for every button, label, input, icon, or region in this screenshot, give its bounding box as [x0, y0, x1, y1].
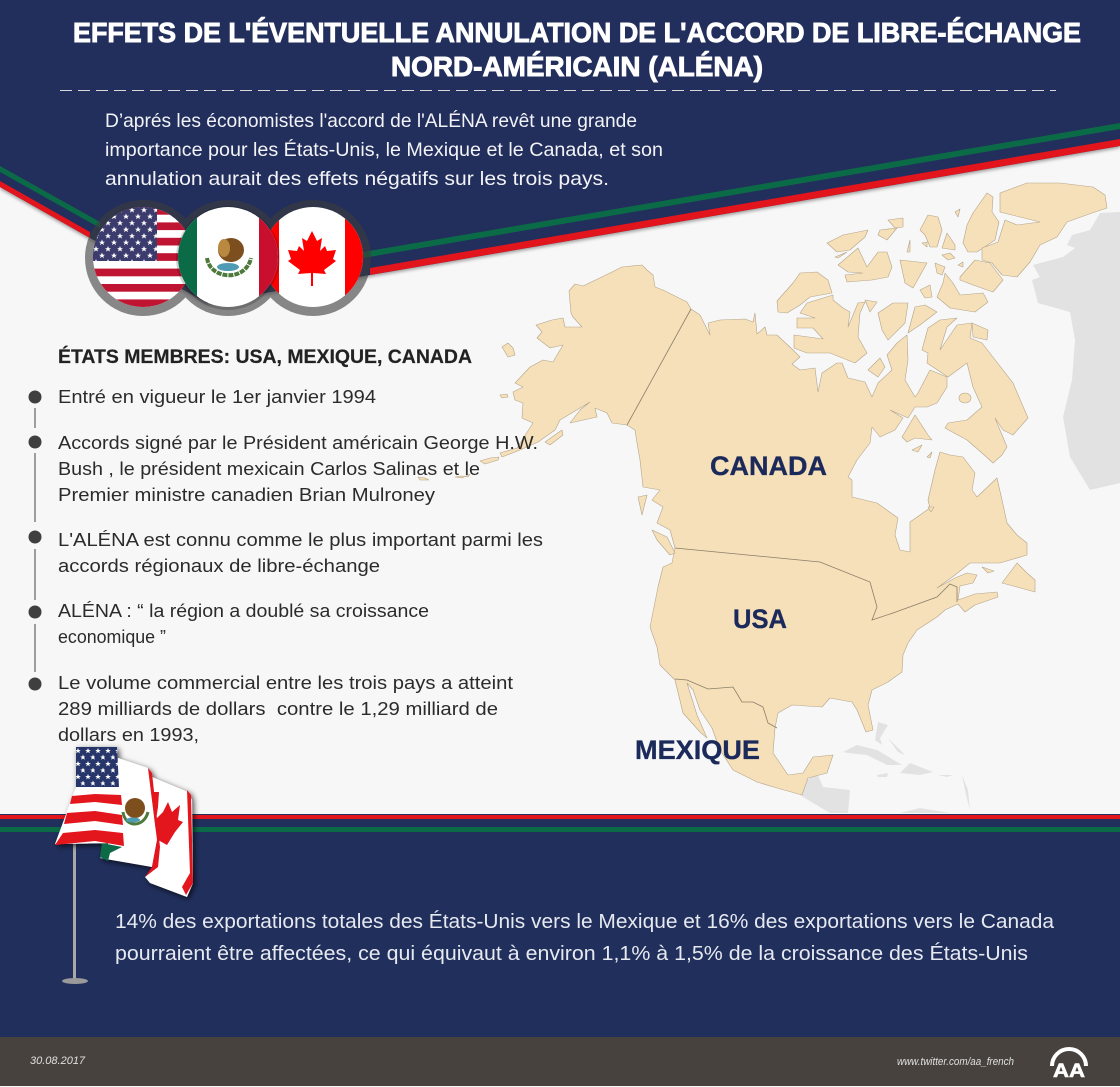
- intro text: D’aprés les économistes l'accord de l'ALÉNA revêt une grande: [105, 109, 637, 132]
- flag rings: [85, 200, 371, 316]
- icon: Mexico flag: [176, 206, 280, 310]
- list text: accords régionaux de libre-échange: [58, 556, 380, 576]
- intro text: annulation aurait des effets négatifs sur les trois pays.: [105, 168, 609, 190]
- list text: 289 milliards de dollars contre le 1,29 milliard de: [58, 699, 498, 719]
- stripes: right: [363, 123, 1120, 275]
- footer bar: [0, 1037, 1120, 1086]
- title: [73, 17, 1081, 82]
- list text: Accords signé par le Président américain George H.W.: [58, 433, 538, 453]
- map: North America: [418, 183, 1120, 813]
- footer url: www.twitter.com/aa_french: [897, 1056, 1014, 1068]
- map label: Canada: CANADA: [710, 451, 827, 481]
- Canada part: [145, 777, 193, 897]
- title: NORD-AMÉRICAIN (ALÉNA): [391, 51, 763, 82]
- map label: USA: USA: [733, 604, 787, 634]
- list text: [58, 387, 543, 745]
- icon: flag pole: [62, 843, 88, 984]
- panel: top navy band: [0, 0, 1120, 303]
- intro text: importance pour les États-Unis, le Mexique et le Canada, et son: [105, 138, 663, 161]
- list text: Bush , le président mexicain Carlos Salinas et le: [58, 459, 480, 479]
- list text: Le volume commercial entre les trois pays a atteint: [58, 673, 513, 693]
- bottom text: 14% des exportations totales des États-Unis vers le Mexique et 16% des exportations vers le Canada: [115, 910, 1055, 933]
- Mexico part: [100, 758, 160, 877]
- date: 30.08.2017: [30, 1055, 86, 1067]
- intro text: [105, 109, 663, 190]
- map: borders: [627, 309, 957, 728]
- map: mainland: [500, 265, 1027, 795]
- icon: USA flag: [93, 207, 193, 307]
- bottom text: [115, 910, 1055, 965]
- list text: dollars en 1993,: [58, 725, 199, 745]
- timeline bullets: [28, 390, 42, 690]
- map: caribbean and central america: [800, 722, 970, 813]
- list text: ALÉNA : “ la région a doublé sa croissance: [58, 601, 429, 621]
- flags: USA, Mexico, Canada: [85, 200, 371, 316]
- stripes: left: [0, 166, 100, 238]
- heading: member states: ÉTATS MEMBRES: USA, MEXIQUE, CANADA: [58, 346, 472, 368]
- list text: Entré en vigueur le 1er janvier 1994: [58, 387, 376, 407]
- list text: L'ALÉNA est connu comme le plus important parmi les: [58, 530, 543, 550]
- bottom text: pourraient être affectées, ce qui équivaut à environ 1,1% à 1,5% de la croissance des États-Unis: [115, 942, 1028, 965]
- icon: Canada flag: [263, 207, 363, 307]
- map: land: [418, 183, 1107, 795]
- map: arctic and coastal islands: [777, 272, 832, 313]
- map label: Mexique: MEXIQUE: [635, 735, 760, 765]
- list text: economique ”: [58, 627, 166, 647]
- list text: Premier ministre canadien Brian Mulroney: [58, 485, 435, 505]
- title: EFFETS DE L'ÉVENTUELLE ANNULATION DE L'ACCORD DE LIBRE-ÉCHANGE: [73, 17, 1081, 48]
- icon: AA logo: [1052, 1049, 1086, 1082]
- panel: bottom navy band: [0, 814, 1120, 1038]
- icon: waving three-nation flag: [55, 747, 193, 897]
- map: greenland: [1032, 212, 1120, 490]
- icon: AA logo: AA: [1053, 1061, 1085, 1082]
- USA part: [55, 747, 124, 846]
